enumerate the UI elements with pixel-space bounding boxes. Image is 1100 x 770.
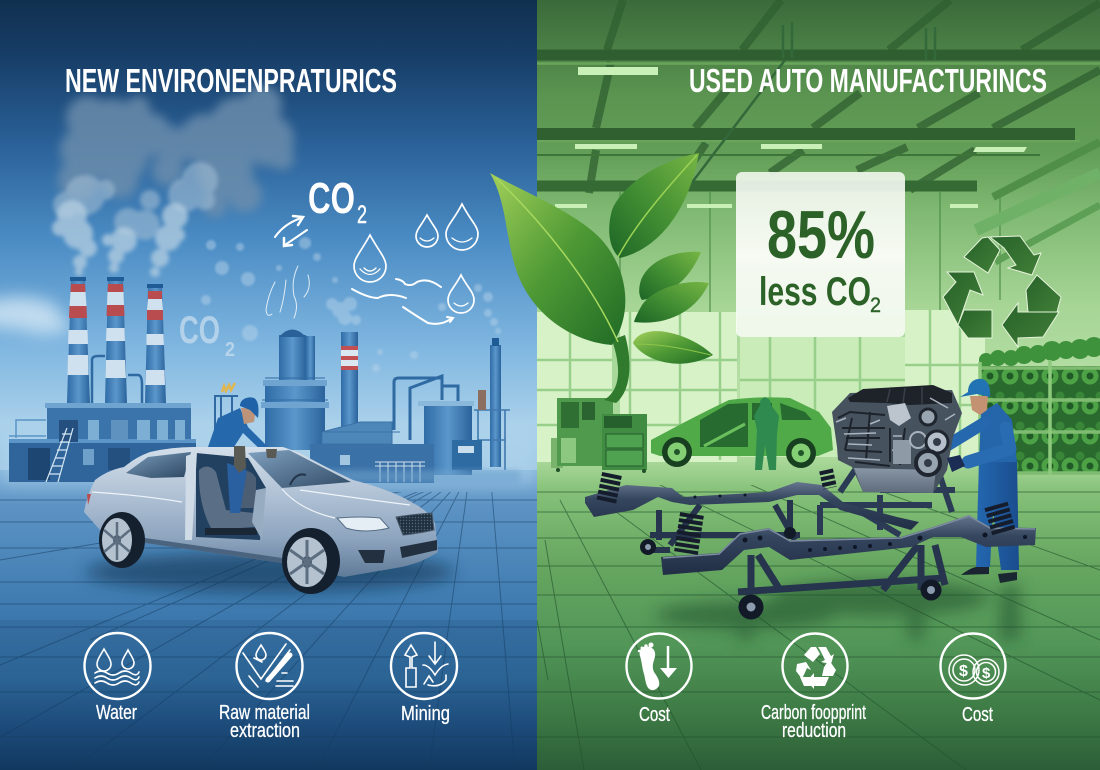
small leaf one bbox=[639, 252, 701, 300]
faded CO2 label in the sky: CO bbox=[179, 309, 220, 352]
worker leg in cabin bbox=[227, 463, 247, 513]
parts shelves bbox=[979, 337, 1100, 475]
factory windows bbox=[537, 310, 985, 462]
shop equipment cabinets bbox=[551, 398, 647, 473]
title: left: NEW ENVIRONENPRATURICS bbox=[65, 62, 397, 99]
floor grid: right bbox=[537, 480, 1100, 770]
frame bolt holes bbox=[694, 494, 1027, 552]
front frame rail bbox=[661, 515, 1036, 575]
stat caption: less CO bbox=[759, 270, 871, 314]
icon: coins bbox=[940, 634, 1006, 698]
engine stand bbox=[820, 470, 955, 535]
car lower sill and rear light bbox=[145, 538, 282, 563]
coverall legs and torso bbox=[976, 460, 1019, 570]
technician in blue coveralls bbox=[948, 379, 1019, 583]
floor grid: left bbox=[0, 492, 537, 744]
icon: recycling bbox=[782, 634, 848, 698]
icon: mining bbox=[391, 633, 457, 699]
label: cost (coins): Cost bbox=[962, 704, 993, 726]
plant stem bbox=[604, 335, 629, 403]
pollution particles bbox=[201, 237, 501, 372]
upper leaf bbox=[609, 153, 699, 258]
smoke plumes from chimneys bbox=[52, 85, 294, 277]
open door edge bbox=[185, 452, 197, 540]
small leaf three bbox=[633, 331, 713, 364]
stat caption subscript: 2 bbox=[870, 294, 881, 317]
CO2 subscript: 2 bbox=[357, 201, 367, 229]
label: raw material extraction: Raw material bbox=[219, 702, 310, 724]
panel: new car manufacturing (left, blue) bbox=[0, 0, 537, 770]
emissions cycle arrows and air squiggles bbox=[266, 216, 309, 318]
rear side windows bbox=[126, 452, 191, 478]
label: cost (footprint): Cost bbox=[639, 704, 670, 726]
panel: used auto manufacturing (right, green) bbox=[537, 0, 1100, 770]
shadows under chassis bbox=[655, 580, 1020, 641]
rear frame rail bbox=[585, 482, 919, 530]
icon: water bbox=[84, 633, 150, 699]
reconditioned engine bbox=[832, 385, 962, 493]
label: carbon footprint reduction bbox=[761, 702, 866, 742]
near arm bbox=[968, 428, 1010, 462]
label: raw material extraction bbox=[219, 702, 310, 742]
car body bbox=[84, 447, 438, 577]
refinery towers and tanks bbox=[215, 330, 520, 483]
windshield bbox=[248, 450, 351, 488]
icon: coins: $ bbox=[959, 663, 968, 680]
label: water: Water bbox=[96, 702, 137, 724]
rolling chassis frame bbox=[585, 470, 1036, 620]
frame supports bbox=[650, 500, 800, 550]
stat card: 85% less CO2 bbox=[736, 172, 905, 337]
chimneys with red and white bands bbox=[67, 277, 166, 403]
wheels bbox=[99, 512, 340, 594]
worker gloves bbox=[234, 446, 277, 473]
white CO2 label: CO bbox=[308, 174, 355, 223]
cabin opening and seats bbox=[196, 446, 277, 540]
ladder bbox=[46, 428, 73, 482]
label: mining: Mining bbox=[401, 703, 450, 725]
frame top highlight bbox=[663, 516, 1035, 558]
label: carbon footprint reduction: Carbon foopprint bbox=[761, 702, 866, 724]
headlight bbox=[337, 517, 389, 531]
icon: footprint down bbox=[626, 634, 692, 698]
worker leaning over the car bbox=[208, 397, 268, 447]
coil springs bbox=[606, 470, 1004, 553]
bottom vignette: left bbox=[0, 620, 537, 680]
faded CO2 subscript: 2 bbox=[225, 339, 235, 361]
small leaf two bbox=[634, 282, 709, 323]
ceiling lights bbox=[555, 67, 1027, 208]
recycling symbol bbox=[943, 236, 1061, 347]
cloud: left horizon bbox=[0, 297, 71, 334]
lower air intake bbox=[358, 540, 437, 563]
water drops bbox=[354, 204, 478, 313]
front stand legs and trolley bar bbox=[738, 545, 945, 592]
new silver car with open door bbox=[84, 397, 455, 594]
icon: coins: $ bbox=[982, 665, 991, 682]
boots bbox=[961, 567, 1017, 583]
background technician bbox=[754, 397, 779, 470]
ceiling beams and pipes bbox=[537, 0, 1100, 320]
label: carbon footprint reduction: reduction bbox=[782, 720, 846, 742]
front grille bbox=[396, 513, 434, 535]
stat value: 85% bbox=[767, 197, 875, 273]
head and cap bbox=[970, 396, 988, 415]
green wagon in the background bbox=[651, 397, 833, 470]
icon: raw material extraction bbox=[236, 633, 302, 699]
technician gloved hand bbox=[947, 455, 965, 472]
casters bbox=[640, 527, 942, 620]
water flow lines bbox=[352, 279, 453, 324]
plant sprout: central leaves bbox=[490, 153, 713, 403]
far arm bbox=[948, 423, 984, 445]
large leaf bbox=[490, 173, 625, 345]
label: raw material extraction: extraction bbox=[230, 720, 300, 742]
factory building bbox=[9, 356, 196, 482]
steering wheel bbox=[290, 474, 306, 485]
